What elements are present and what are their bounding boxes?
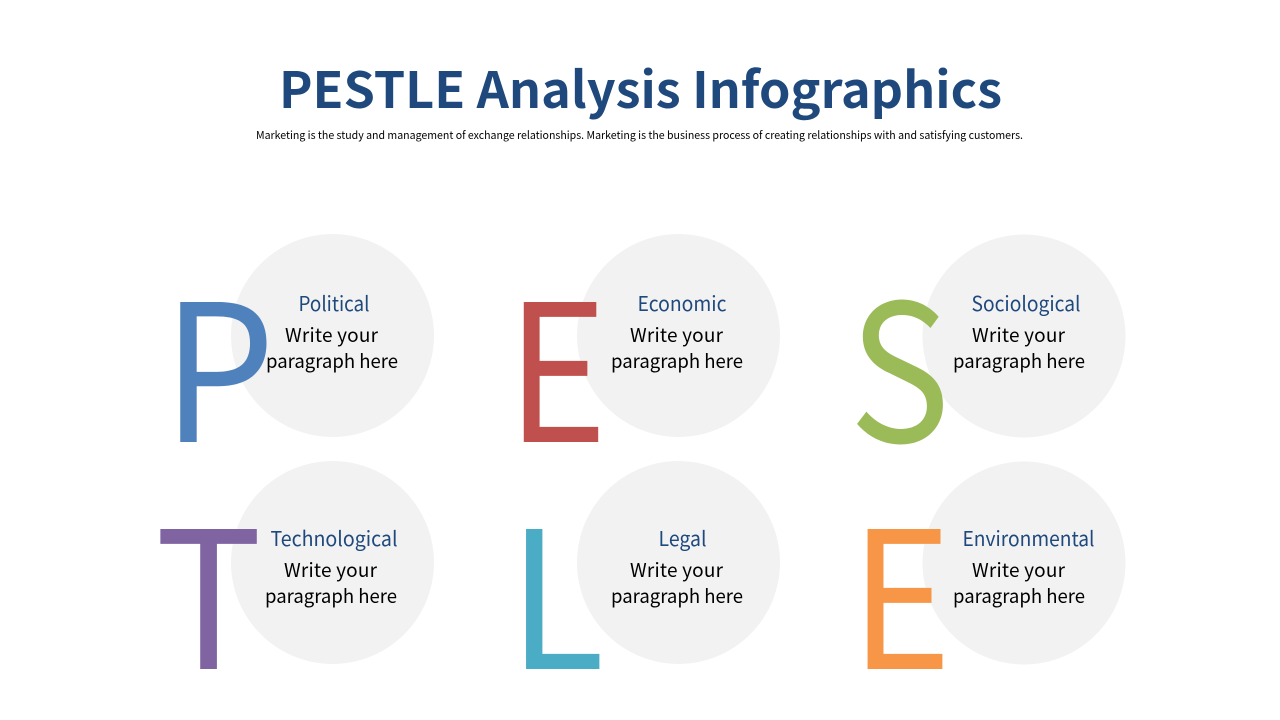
heading: sociological: Sociological (972, 287, 1080, 317)
paragraph: environmental: Write your (972, 556, 1066, 583)
heading: legal: Legal (658, 522, 706, 552)
paragraph: technological: paragraph here (265, 582, 397, 609)
subtitle: Marketing is the study and management of exchange relationships. Marketing is the business process of creating relationships with and satisfying customers. (256, 127, 1023, 143)
paragraph: political: Write your (285, 321, 379, 348)
heading: economic: Economic (638, 287, 726, 317)
circle: sociological (922, 234, 1126, 438)
circle: environmental (922, 462, 1126, 664)
paragraph: legal: paragraph here (611, 582, 743, 609)
letter P: P (162, 222, 275, 498)
circle: political (231, 234, 434, 437)
paragraph: technological (265, 556, 397, 609)
paragraph: economic: paragraph here (611, 347, 743, 374)
paragraph: environmental: paragraph here (953, 582, 1085, 609)
paragraph: political (266, 321, 398, 374)
letter T: T (155, 448, 262, 720)
title: PESTLE Analysis Infographics (279, 51, 1002, 123)
panel: political (162, 222, 434, 498)
panel: technological (155, 448, 434, 720)
paragraph: legal (611, 556, 743, 609)
circle: legal (577, 461, 780, 664)
panel: sociological (849, 221, 1126, 498)
letter E: E (506, 221, 608, 498)
paragraph: political: paragraph here (266, 347, 398, 374)
circle: technological (231, 461, 434, 664)
heading: environmental: Environmental (962, 522, 1094, 552)
paragraph: environmental (953, 556, 1085, 609)
letter L: L (508, 448, 605, 720)
letter S: S (849, 221, 950, 498)
paragraph: economic (611, 321, 743, 374)
paragraph: legal: Write your (630, 556, 724, 583)
paragraph: economic: Write your (630, 321, 724, 348)
circle: economic (577, 234, 780, 437)
panel: economic (506, 221, 780, 498)
panel: legal (508, 448, 780, 720)
heading: technological: Technological (270, 522, 398, 552)
heading: political: Political (298, 287, 370, 317)
panel: environmental (850, 449, 1126, 720)
paragraph: sociological: Write your (972, 321, 1066, 348)
paragraph: technological: Write your (284, 556, 378, 583)
letter E: E (850, 449, 952, 720)
paragraph: sociological (953, 321, 1085, 374)
paragraph: sociological: paragraph here (953, 347, 1085, 374)
